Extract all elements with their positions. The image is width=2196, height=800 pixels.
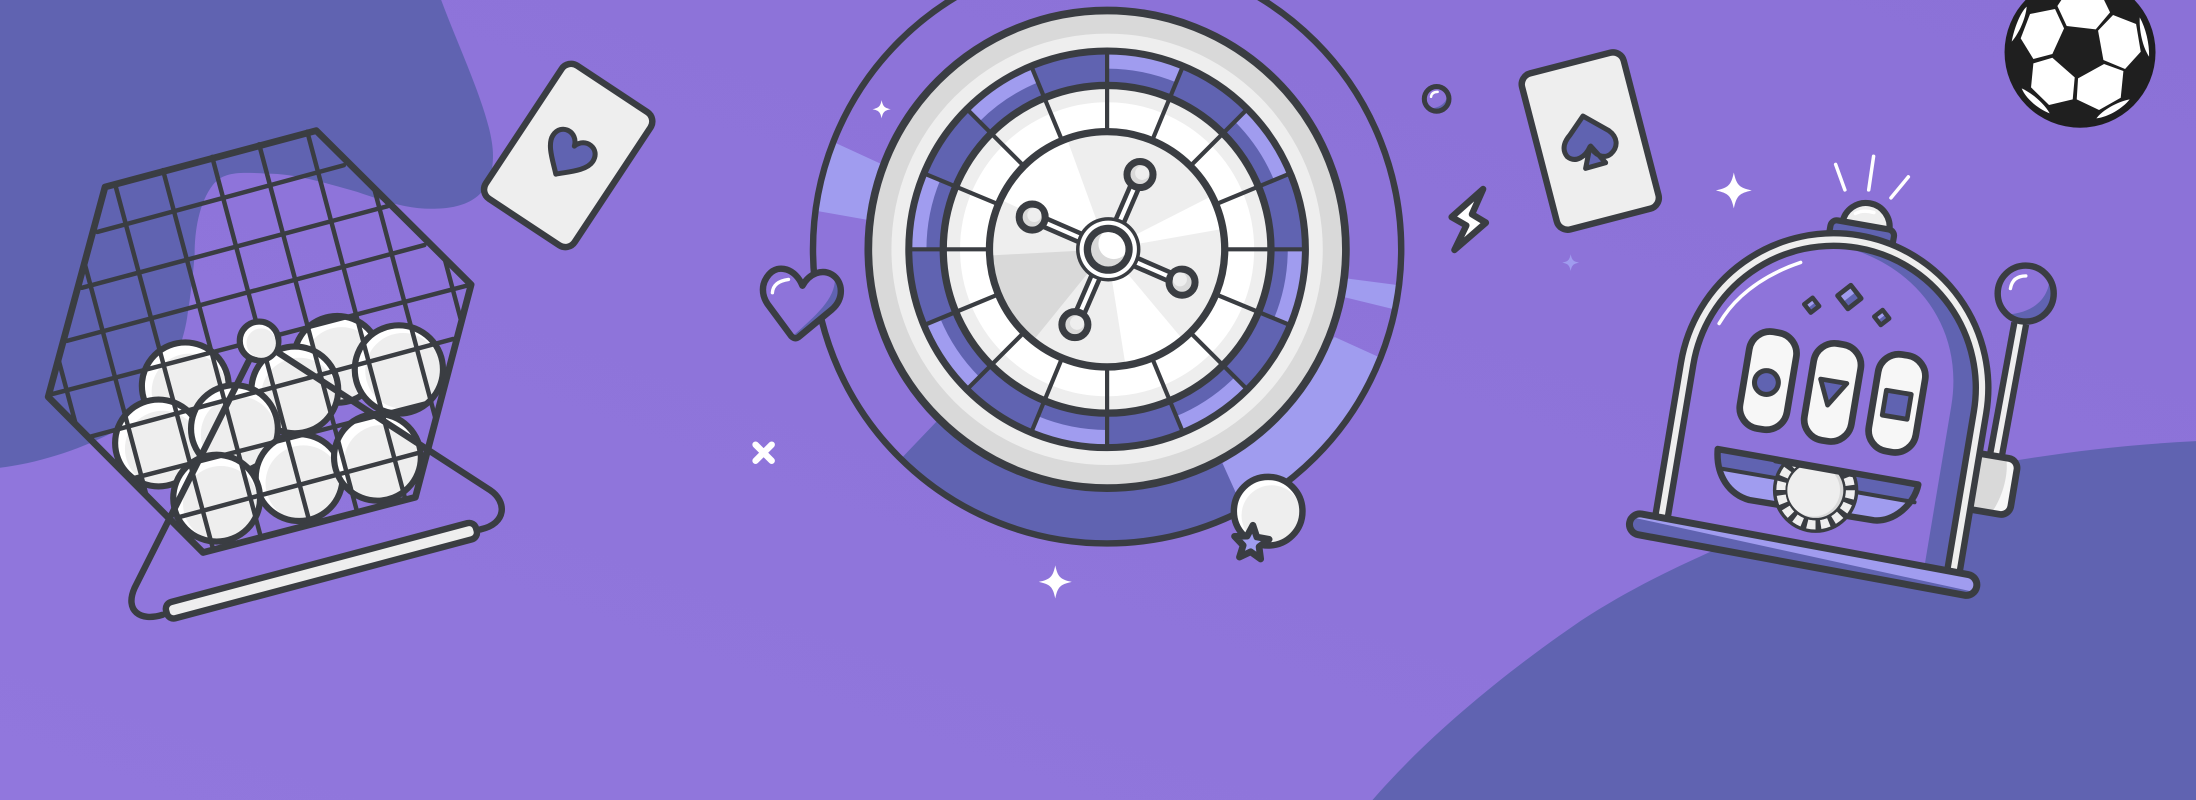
roulette outer ring (812, 0, 1408, 588)
dome glare (1719, 262, 1801, 324)
card: heart (480, 60, 657, 251)
turret hub (1076, 217, 1140, 282)
icon: lightning bolt (1452, 189, 1486, 250)
stand handle bar (164, 521, 479, 620)
sparkle (1716, 173, 1752, 208)
dome (1652, 230, 1992, 570)
blob: bottom right (1372, 441, 2196, 800)
large diamond (1838, 285, 1861, 309)
bingo cage (48, 131, 502, 620)
lever rod (1996, 324, 2020, 457)
alarm rays (1836, 156, 1908, 198)
blob: top left (0, 0, 493, 468)
reel 1 (1737, 328, 1800, 433)
icon: heart on ring (763, 269, 846, 345)
lever handle box (1950, 450, 2019, 516)
reel 3 (1865, 351, 1929, 456)
wheel spokes (910, 52, 1305, 447)
small diamond (1804, 298, 1819, 313)
machine base bar (1628, 512, 1979, 597)
slot machine (1628, 156, 2062, 597)
sparkle (1562, 254, 1579, 271)
card: spade (1519, 50, 1661, 232)
icon: bubble (1424, 87, 1453, 116)
alarm lamp (1828, 197, 1899, 251)
small diamond (1874, 310, 1889, 325)
stand arms (131, 340, 502, 617)
number pockets band (909, 51, 1305, 448)
reel 2 (1801, 340, 1864, 445)
lever knob (1998, 266, 2062, 330)
turret knobs (1019, 161, 1195, 338)
inner ring (943, 85, 1271, 413)
cage wire grid (53, 132, 467, 548)
roulette ball (1234, 477, 1302, 546)
bingo balls (115, 316, 443, 542)
icon: cross (756, 445, 772, 461)
wheel centre disc (986, 128, 1228, 371)
wheel rim (868, 11, 1346, 488)
cage hexagon frame (48, 131, 471, 553)
poker chip (1772, 462, 1858, 533)
sparkle (873, 100, 891, 118)
coin tray (1718, 449, 1918, 520)
turret arms (1032, 175, 1182, 325)
soccer ball (2005, 0, 2156, 128)
sparkle (1039, 565, 1072, 598)
roulette wheel (868, 11, 1346, 488)
cage top pivot ball (240, 322, 278, 360)
icon: star (1233, 524, 1270, 560)
